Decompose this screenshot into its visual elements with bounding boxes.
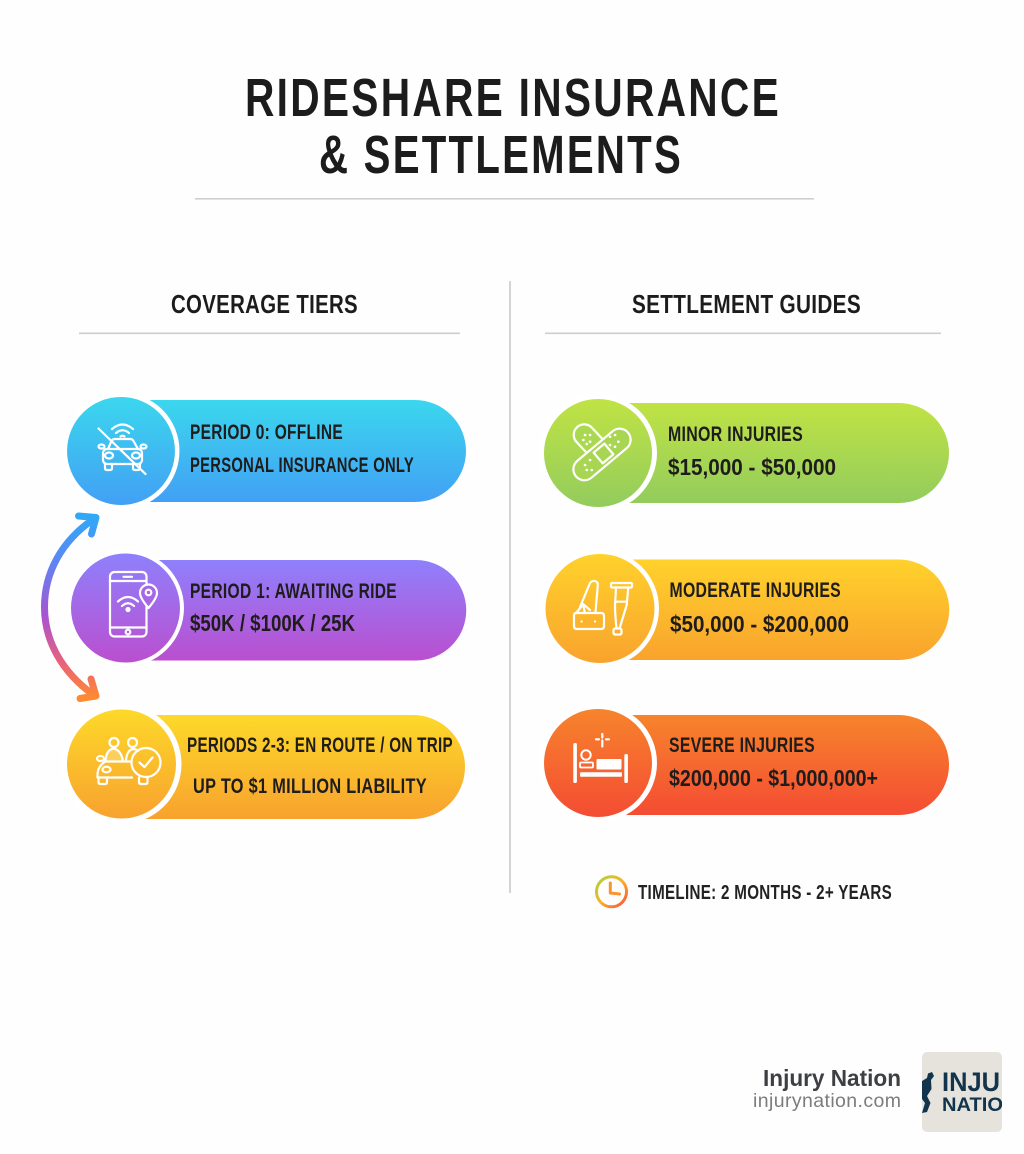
text: minor injuries [668, 423, 836, 480]
text: periods 2-3: PERIODS 2-3: EN ROUTE / ON TRIP [187, 734, 453, 757]
text: minor injuries: MINOR INJURIES [668, 423, 803, 446]
arrow: cycle between periods [44, 516, 96, 698]
icon: hospital bed [573, 734, 628, 783]
panel: minor injuries [539, 394, 949, 512]
title: & SETTLEMENTS [319, 125, 683, 185]
text: moderate injuries: $50,000 - $200,000 [670, 611, 849, 637]
heading: coverage tiers: COVERAGE TIERS [171, 289, 358, 319]
icon: phone with wifi and pin [110, 572, 157, 636]
text: period 1: PERIOD 1: AWAITING RIDE [190, 580, 397, 603]
icon: car with passengers and check [97, 738, 160, 784]
title [245, 68, 781, 185]
panel: moderate injuries [541, 550, 949, 668]
text: period 0 [190, 421, 414, 477]
panel: period 1 awaiting ride [67, 550, 466, 666]
icon: clock [596, 877, 626, 907]
text: periods 2-3: UP TO $1 MILLION LIABILITY [193, 775, 427, 798]
panel: period 0 offline [62, 392, 466, 510]
panel: severe injuries [539, 704, 949, 822]
text: periods 2-3 [187, 734, 453, 798]
heading: settlement guides: SETTLEMENT GUIDES [632, 289, 861, 319]
text: period 1: $50K / $100K / 25K [190, 610, 355, 636]
text: period 0: PERIOD 0: OFFLINE [190, 421, 343, 444]
icon: car with wifi crossed out [98, 424, 146, 474]
logo: NATIO [942, 1095, 1003, 1116]
text: timeline: TIMELINE: 2 MONTHS - 2+ YEARS [638, 882, 892, 904]
text: moderate injuries: MODERATE INJURIES [670, 579, 841, 602]
text: severe injuries: $200,000 - $1,000,000+ [669, 765, 878, 791]
panel: periods 2-3 en route [62, 704, 465, 824]
icon: bandage [569, 420, 635, 485]
brand url: injurynation.com [753, 1090, 901, 1112]
text: minor injuries: $15,000 - $50,000 [668, 454, 836, 480]
text: severe injuries: SEVERE INJURIES [669, 734, 815, 757]
text: period 0: PERSONAL INSURANCE ONLY [190, 454, 414, 477]
brand name: Injury Nation [763, 1065, 901, 1091]
text: severe injuries [669, 734, 878, 791]
text: period 1 [190, 580, 397, 636]
icon: arm splint and crutch [574, 581, 632, 634]
text: moderate injuries [670, 579, 849, 637]
title: RIDESHARE INSURANCE [245, 68, 781, 128]
logo [922, 1052, 1003, 1132]
logo: INJU [942, 1067, 1000, 1097]
